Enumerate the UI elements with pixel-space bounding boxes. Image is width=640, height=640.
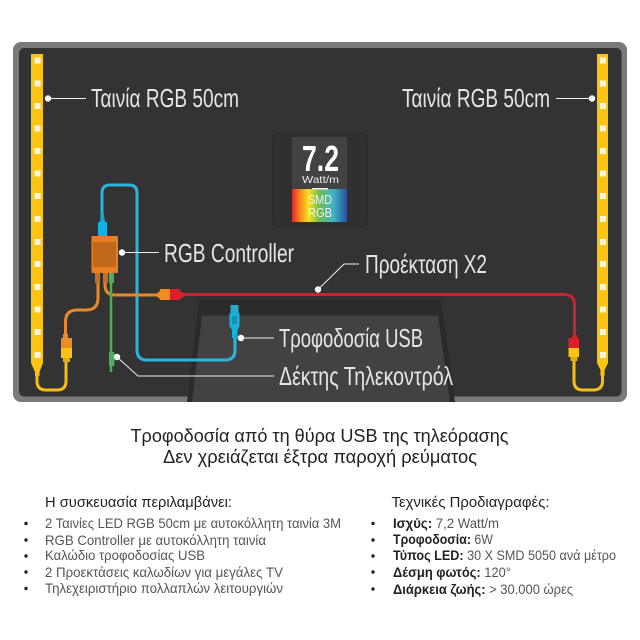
label: USB power: Τροφοδοσία USB (279, 323, 423, 353)
power note: Δεν χρειάζεται έξτρα παροχή ρεύματος (163, 447, 477, 467)
label: remote receiver: Δέκτης Τηλεκοντρόλ (279, 361, 453, 391)
cable: red extension (180, 294, 574, 338)
label: right strip: Ταινία RGB 50cm (402, 83, 550, 113)
label: left strip (45, 83, 239, 113)
technical specs list: Διάρκεια ζωής: > 30.000 ώρες (393, 581, 573, 597)
label: extension: Προέκταση X2 (365, 249, 487, 279)
package contents list: Η συσκευασία περιλαμβάνει: (45, 494, 232, 511)
cable: orange to strip (66, 281, 98, 338)
cable: orange to extension (105, 281, 158, 295)
spec badge: SMD (308, 192, 332, 207)
package contents list (24, 494, 341, 596)
left LED strip (31, 54, 43, 376)
right LED strip (597, 54, 608, 376)
cable: green remote (110, 276, 112, 372)
cable: blue USB (102, 185, 235, 360)
remote receiver (109, 352, 114, 366)
package contents list: Τηλεχειριστήριο πολλαπλών λειτουργιών (45, 580, 283, 596)
RGB controller (92, 212, 118, 283)
power note: Τροφοδοσία από τη θύρα USB της τηλεόρασης (130, 426, 509, 446)
technical specs list: Τροφοδοσία: 6W (393, 531, 494, 547)
cable: left yellow loop (37, 360, 66, 390)
connector: red/yellow right (568, 335, 579, 361)
USB plug (230, 305, 240, 338)
power note (130, 426, 509, 467)
label: RGB controller (119, 238, 294, 268)
connector: orange/red on extension (155, 289, 185, 300)
cable: right yellow loop (574, 358, 602, 390)
spec badge (273, 133, 367, 227)
technical specs list: Τύπος LED: 30 X SMD 5050 ανά μέτρο (393, 547, 616, 563)
technical specs list (371, 494, 616, 597)
package contents list: 2 Ταινίες LED RGB 50cm με αυτοκόλλητη ταινία 3M (45, 515, 341, 531)
package contents list: Καλώδιο τροφοδοσίας USB (45, 547, 205, 563)
label: left strip: Ταινία RGB 50cm (91, 83, 239, 113)
technical specs list: Δέσμη φωτός: 120° (393, 564, 511, 580)
spec badge: 7.2 (302, 138, 339, 179)
spec badge: RGB (308, 205, 332, 220)
technical specs list: Τεχνικές Προδιαγραφές: (392, 494, 550, 511)
label: remote receiver (114, 354, 453, 391)
connector: orange/yellow left (61, 334, 72, 362)
label: RGB controller: RGB Controller (164, 238, 294, 268)
panel: TV back (13, 42, 627, 402)
package contents list: RGB Controller με αυτοκόλλητη ταινία (45, 532, 266, 548)
package contents list: 2 Προεκτάσεις καλωδίων για μεγάλες TV (45, 564, 284, 580)
label: USB power (238, 323, 423, 353)
TV stand (187, 300, 455, 402)
technical specs list: Ισχύς: 7,2 Watt/m (393, 515, 499, 531)
spec badge: Watt/m (302, 174, 339, 186)
label: extension (315, 249, 487, 293)
